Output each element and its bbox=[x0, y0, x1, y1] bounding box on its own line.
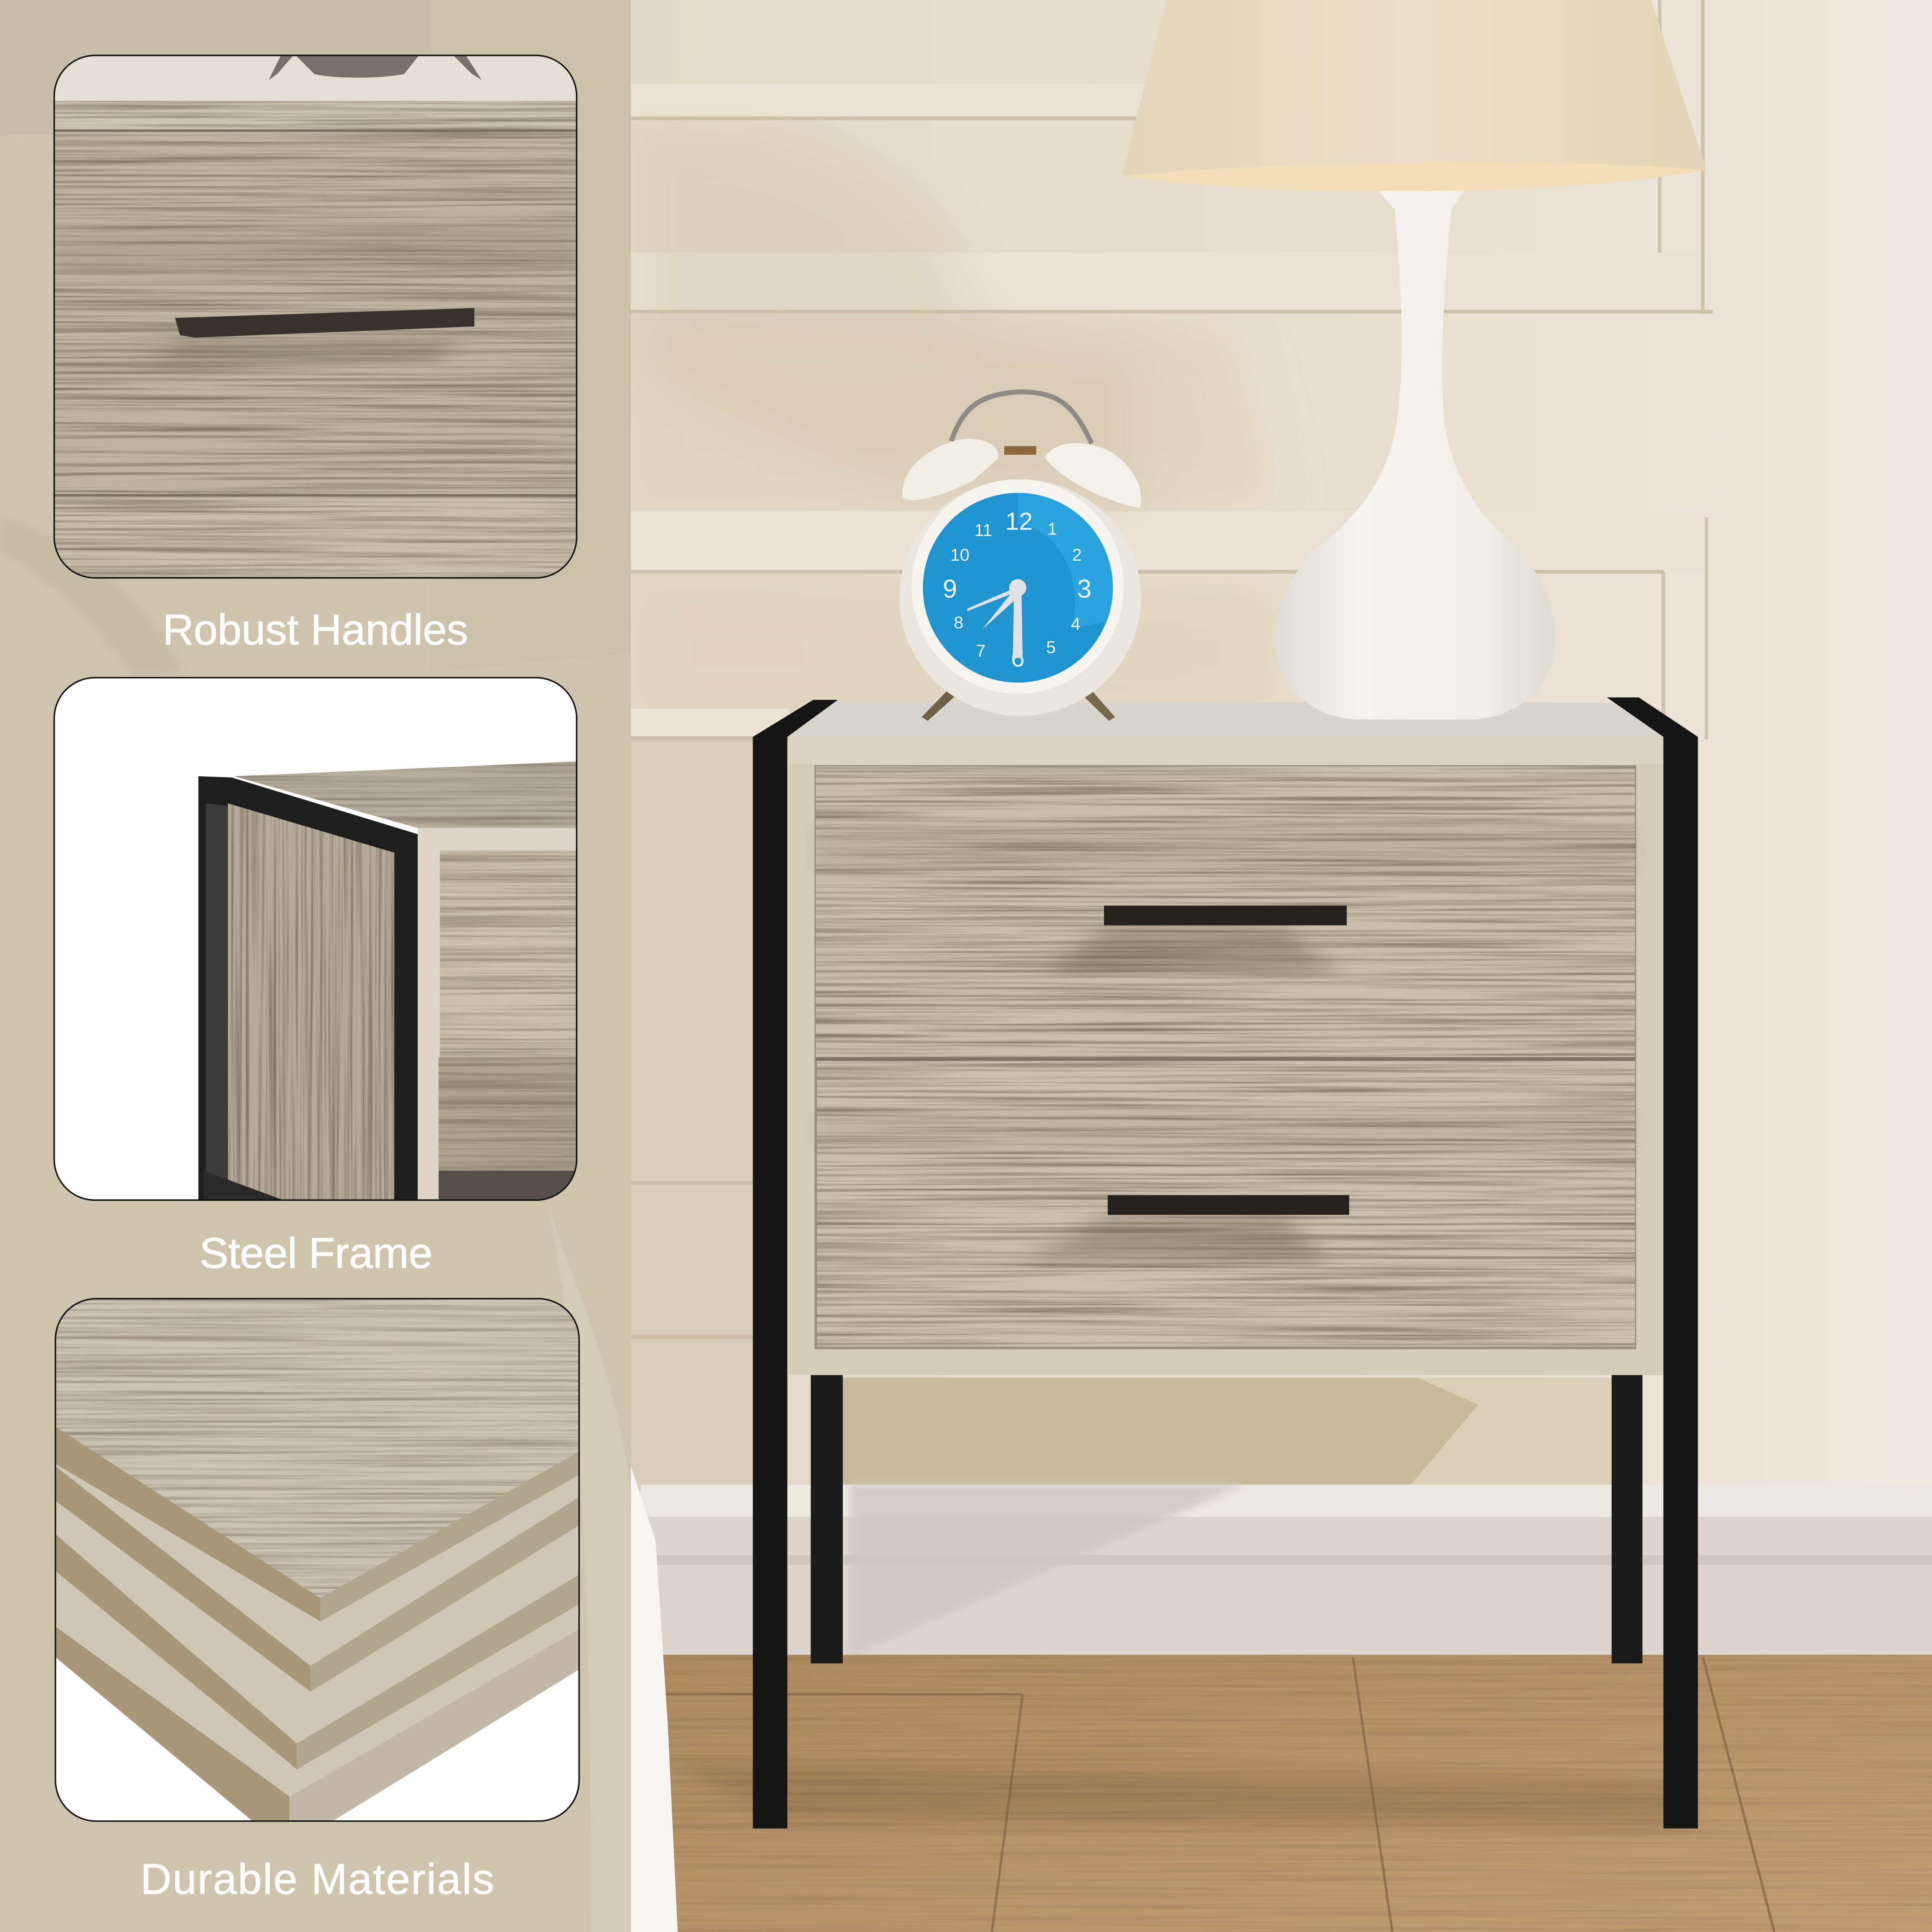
clock numerals: 5 bbox=[1046, 638, 1056, 657]
back legs bbox=[811, 1375, 1643, 1663]
clock numerals: 3 bbox=[1077, 574, 1091, 603]
drawer handle 1 bbox=[1104, 905, 1347, 925]
lamp base bbox=[1275, 187, 1555, 720]
alarm clock bbox=[899, 392, 1141, 721]
clock handle bbox=[951, 392, 1092, 444]
drawer handle bbox=[158, 308, 474, 364]
panel: steel frame bbox=[54, 677, 577, 1200]
clock legs bbox=[922, 680, 965, 721]
table lamp bbox=[1121, 0, 1707, 720]
clock numerals: 6 bbox=[1011, 645, 1024, 672]
clock bells bbox=[902, 439, 998, 500]
clock numerals bbox=[943, 508, 1091, 672]
steel frame bars bbox=[198, 776, 418, 1200]
clock hands bbox=[967, 579, 1027, 658]
nightstand bbox=[753, 697, 1698, 1829]
clock hammer bbox=[1004, 446, 1036, 455]
drawer recess bbox=[814, 765, 1636, 1349]
front strip bbox=[418, 850, 440, 1200]
clock body bbox=[899, 479, 1141, 716]
front right leg bbox=[1607, 697, 1698, 1829]
label: durable materials: Durable Materials bbox=[140, 1855, 494, 1903]
clock numerals: 12 bbox=[1005, 508, 1033, 535]
clock numerals: 4 bbox=[1071, 614, 1081, 634]
clock numerals: 9 bbox=[943, 574, 957, 603]
clock numerals: 11 bbox=[974, 520, 992, 540]
icon: alarm clock feet bbox=[269, 55, 482, 80]
open shelf bbox=[439, 1057, 577, 1170]
bottom rail bbox=[789, 1349, 1663, 1375]
bed corner bbox=[631, 1466, 677, 1932]
room photo background bbox=[631, 0, 1932, 1932]
panel: robust handles bbox=[54, 55, 577, 578]
clock numerals: 7 bbox=[976, 641, 986, 661]
side panel bbox=[228, 801, 394, 1200]
clock numerals: 1 bbox=[1048, 519, 1057, 539]
lamp shade bbox=[1121, 0, 1707, 187]
cabinet top bbox=[234, 762, 577, 828]
wood floor bbox=[631, 1655, 1932, 1932]
panel: durable materials bbox=[55, 1299, 579, 1821]
clock face bbox=[923, 493, 1113, 683]
table top surface bbox=[789, 702, 1663, 735]
drawer front bbox=[440, 850, 577, 1057]
drawer handle 2 bbox=[1108, 1195, 1349, 1215]
clock numerals: 8 bbox=[954, 613, 963, 632]
clock numerals: 2 bbox=[1072, 545, 1081, 565]
label: steel frame: Steel Frame bbox=[200, 1229, 432, 1277]
left feature panel background bbox=[0, 0, 631, 1932]
board 3 bbox=[55, 1479, 579, 1769]
board 1 bbox=[55, 1299, 579, 1622]
baseboard bbox=[641, 1485, 1932, 1657]
front top edge bbox=[789, 735, 1663, 765]
clock numerals: 10 bbox=[950, 545, 969, 565]
lamp glow rim bbox=[1124, 162, 1705, 191]
board 4 bbox=[55, 1565, 579, 1821]
board 2 bbox=[55, 1417, 579, 1692]
front left leg bbox=[753, 700, 838, 1829]
drawer 1 bbox=[816, 766, 1635, 1057]
side strips bbox=[789, 764, 1663, 1350]
label: robust handles: Robust Handles bbox=[163, 606, 468, 654]
drawer 2 bbox=[817, 1061, 1635, 1347]
